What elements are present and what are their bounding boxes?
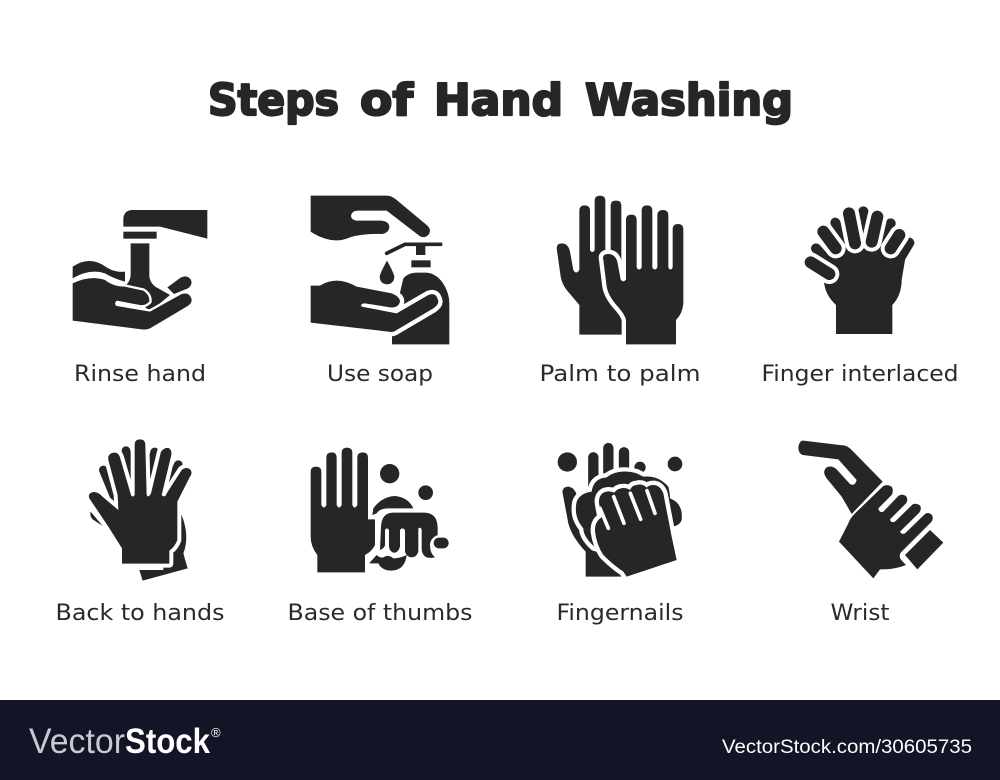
title: Hand	[434, 75, 563, 126]
panel: palm to palm	[540, 196, 700, 387]
icon: forearm	[798, 441, 883, 514]
icon: interlaced fingers	[811, 211, 909, 334]
icon: two hands palm to palm	[557, 196, 683, 344]
footer bar	[0, 700, 1000, 780]
title: Washing	[585, 75, 793, 126]
panel: fingernails	[556, 448, 684, 626]
title: Steps	[208, 75, 339, 126]
icon: soap dispenser and hands	[311, 196, 449, 344]
icon: faucet and hand	[73, 210, 207, 330]
logo: VectorStock: VectorStock	[29, 722, 210, 761]
label: base of thumbs: Base of thumbs	[288, 601, 472, 626]
panel: rinse hand	[73, 210, 207, 387]
icon: fist gripping thumb with soap	[369, 496, 443, 571]
panel: finger interlaced	[762, 211, 958, 387]
panel: base of thumbs	[288, 448, 472, 626]
icon: open hand with soap bubbles	[311, 448, 433, 572]
label: fingernails: Fingernails	[556, 601, 684, 626]
icon: hand over back of hand	[89, 439, 192, 581]
label: palm to palm: Palm to palm	[540, 362, 700, 387]
panel: back to hands	[56, 439, 224, 626]
label: rinse hand: Rinse hand	[74, 362, 206, 387]
front hand	[595, 485, 677, 577]
label: use soap: Use soap	[327, 362, 433, 387]
image id: VectorStock.com/30605735	[722, 737, 972, 758]
panel: use soap	[311, 196, 449, 387]
title	[208, 75, 793, 126]
icon: hand gripping wrist	[839, 485, 943, 578]
logo: registered mark: ®	[211, 725, 221, 740]
title: of	[360, 75, 414, 126]
icon: fingernails with foam	[558, 448, 682, 577]
panel: wrist	[798, 441, 943, 626]
label: wrist: Wrist	[830, 601, 890, 626]
label: back to hands: Back to hands	[56, 601, 224, 626]
label: finger interlaced: Finger interlaced	[762, 362, 958, 387]
foam	[576, 472, 682, 553]
